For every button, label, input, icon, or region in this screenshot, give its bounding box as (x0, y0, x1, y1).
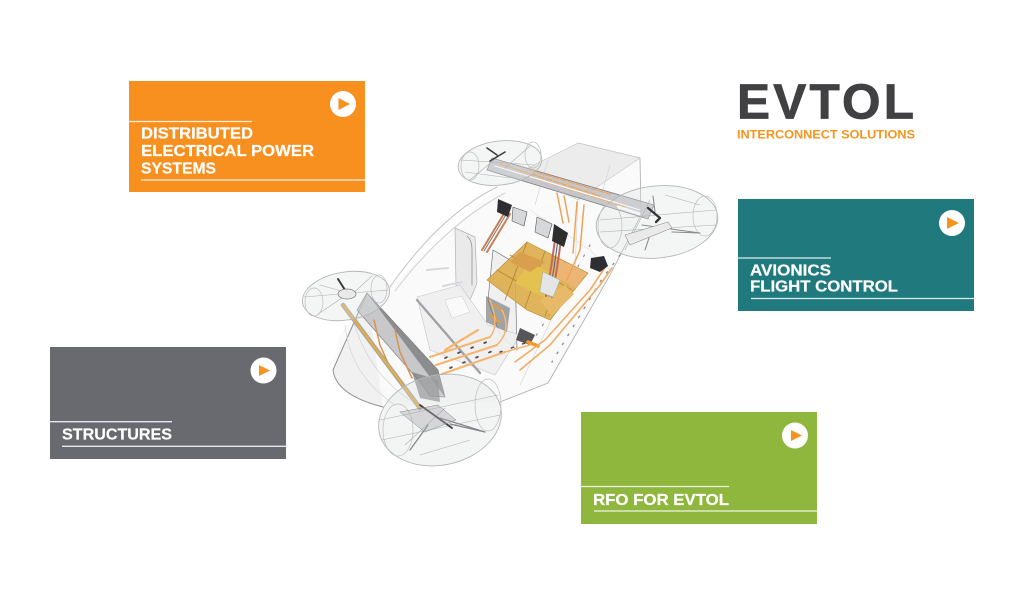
top boom (487, 158, 654, 219)
panel heading: RFO FOR EVTOL (593, 492, 729, 509)
panel: avionics flight control (738, 199, 974, 311)
play icon (330, 91, 356, 117)
panel heading: FLIGHT CONTROL (750, 279, 898, 296)
panel heading: AVIONICS (750, 263, 831, 280)
rotor duct: bottom (370, 363, 510, 477)
panel rules (129, 122, 365, 180)
panel rules (581, 486, 817, 511)
panel heading (141, 126, 314, 178)
panel heading: SYSTEMS (141, 161, 216, 178)
rotor duct: left (299, 265, 393, 327)
logo: EVTOL interconnect solutions: INTERCONNECT SOLUTIONS (737, 128, 915, 142)
aircraft illustration (299, 136, 721, 477)
panel rules (50, 422, 286, 446)
panel: distributed electrical power systems (129, 81, 365, 192)
panel heading (750, 263, 898, 296)
panel heading: ELECTRICAL POWER (141, 143, 314, 160)
wire harnesses (430, 193, 612, 374)
battery pack (486, 242, 588, 346)
cabin floor (417, 285, 520, 375)
logo: EVTOL interconnect solutions: EVTOL (737, 74, 914, 129)
panel heading: STRUCTURES (62, 427, 172, 444)
rotor duct: right (593, 180, 721, 264)
seat back panels (427, 228, 517, 350)
panel heading: DISTRIBUTED (141, 126, 253, 143)
rotor duct: top (456, 136, 544, 190)
left boom (343, 305, 420, 408)
connector modules (497, 199, 608, 272)
panel rules (738, 258, 974, 298)
play icon (782, 422, 808, 448)
play icon (939, 210, 965, 236)
panel: RFO for EVTOL (581, 412, 817, 524)
fuselage shell (333, 143, 641, 407)
play icon (250, 358, 276, 384)
front structural panel (357, 293, 445, 402)
panel: structures (50, 347, 286, 459)
